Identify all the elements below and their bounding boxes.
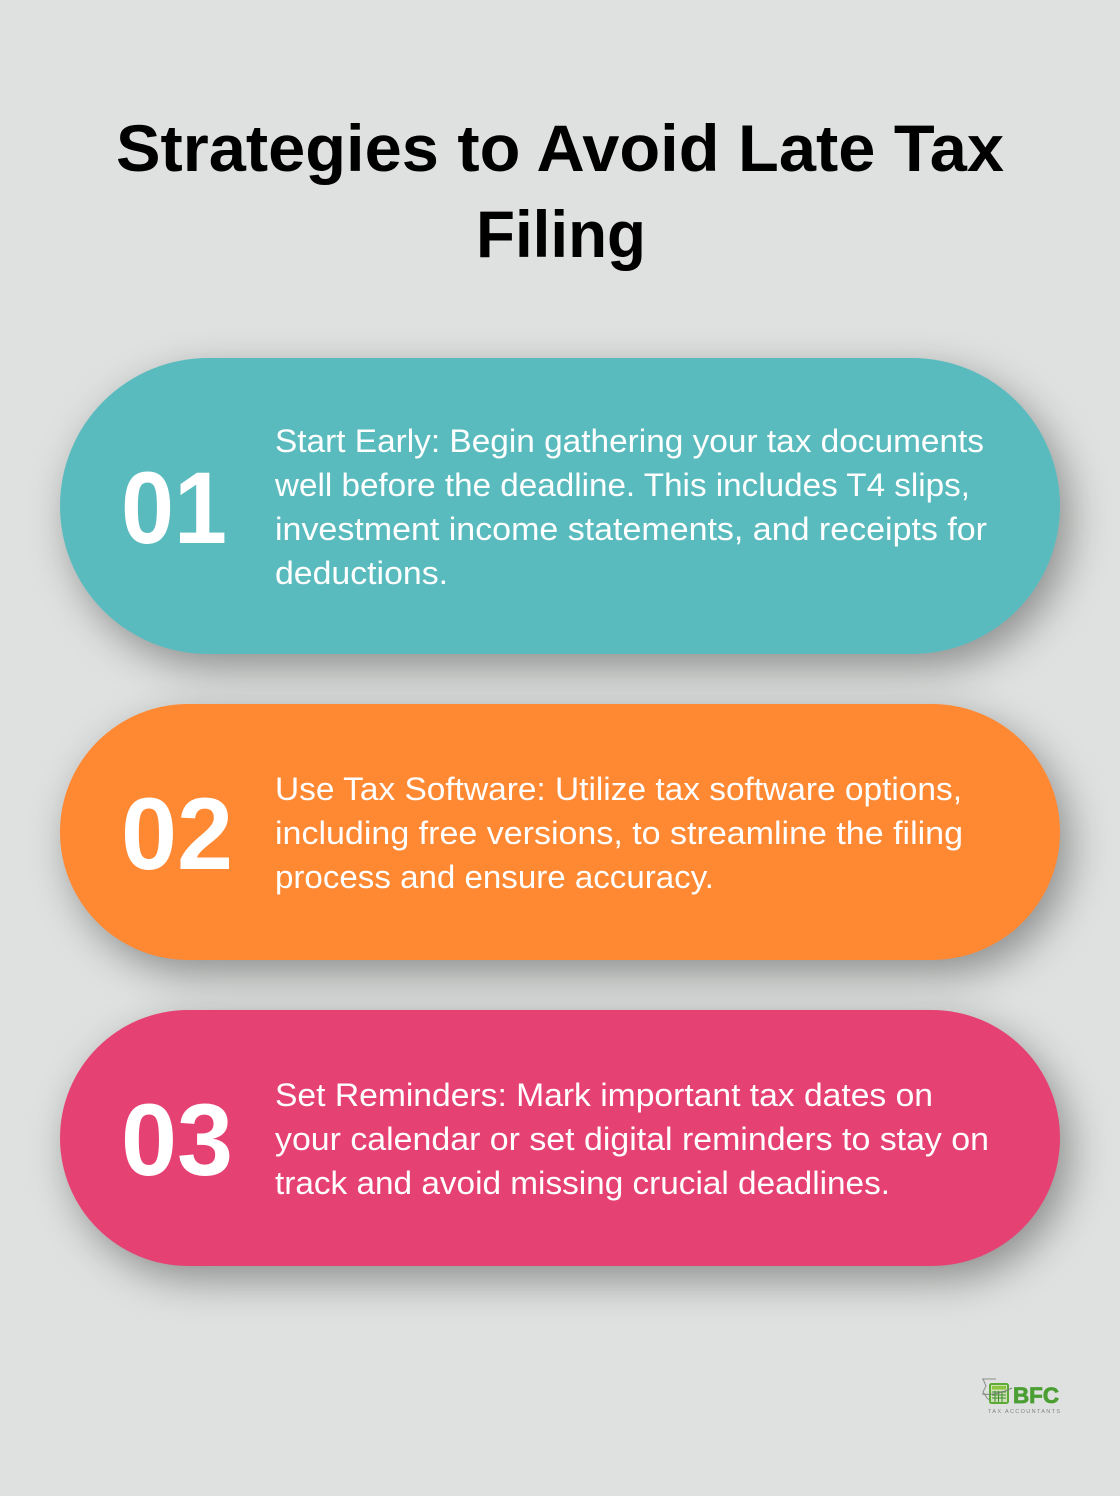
step 01 text: well before the deadline. This includes T4 slips, [274, 467, 970, 503]
logo tagline: TAX ACCOUNTANTS [988, 1409, 1060, 1415]
step 02 text: including free versions, to streamline the filing [275, 815, 963, 851]
step 01 text: Start Early: Begin gathering your tax documents [275, 423, 984, 459]
card background teal [60, 358, 1060, 654]
number 02: 02 [121, 777, 233, 891]
logo: BFC Tax Accountants [982, 1379, 1060, 1415]
icon: calculator [982, 1379, 1012, 1404]
panel: step 03 set reminders [60, 1010, 1060, 1266]
step 01 text: investment income statements, and receipts for [275, 511, 987, 547]
step 03 text: Set Reminders: Mark important tax dates on [275, 1077, 933, 1113]
step 03 text: your calendar or set digital reminders to stay on [275, 1121, 989, 1157]
step 02 text: process and ensure accuracy. [275, 859, 714, 895]
title: Strategies to Avoid Late Tax [116, 111, 1004, 185]
panel: step 02 use tax software [60, 704, 1060, 960]
logo wordmark: BFC [1013, 1383, 1059, 1408]
step 03 text: track and avoid missing crucial deadlines. [275, 1165, 890, 1201]
number 03: 03 [121, 1083, 233, 1197]
card background orange [60, 704, 1060, 960]
step 02 text: Use Tax Software: Utilize tax software options, [275, 771, 962, 807]
step 03 text [275, 1077, 989, 1201]
step 02 text [275, 771, 963, 895]
card background pink [60, 1010, 1060, 1266]
panel: step 01 start early [60, 358, 1060, 654]
title: Filing [476, 197, 646, 271]
step 01 text: deductions. [275, 555, 448, 591]
step 01 text [274, 423, 987, 591]
number 01: 01 [121, 451, 227, 565]
title [116, 111, 1004, 271]
